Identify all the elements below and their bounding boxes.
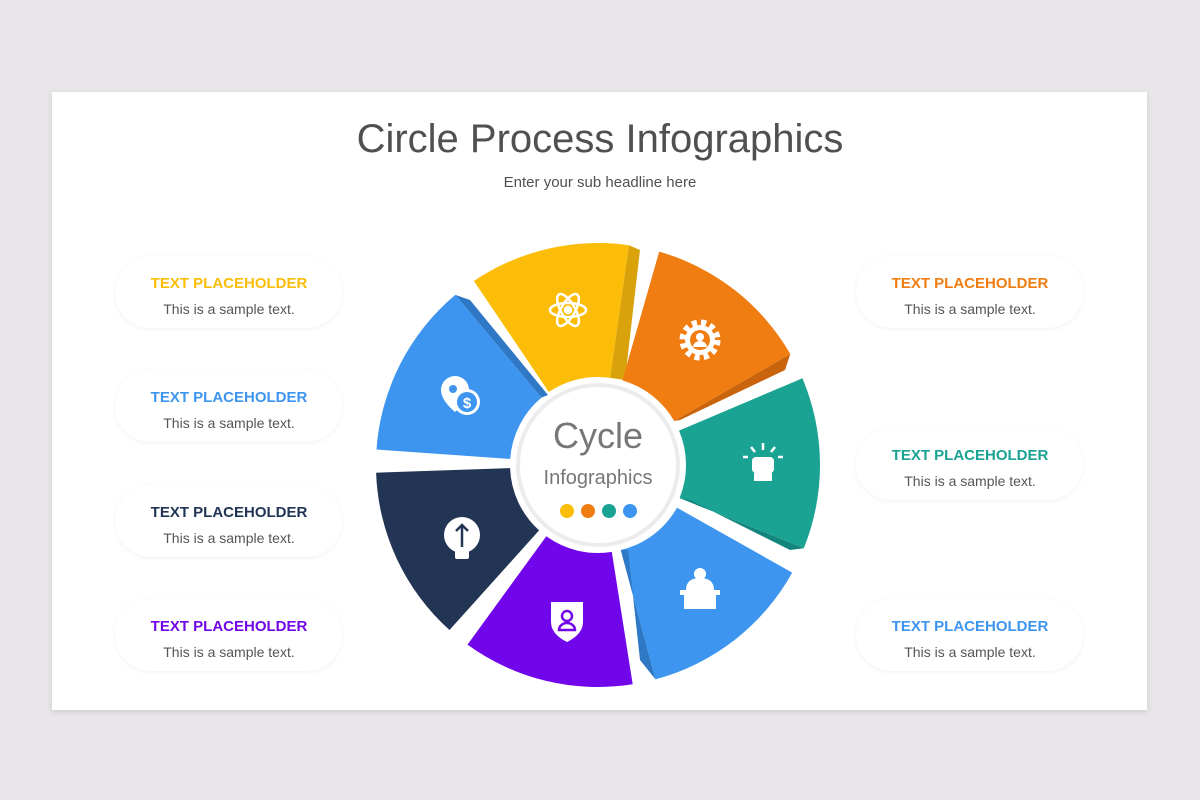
- icon: location dollar: $: [463, 395, 472, 412]
- pill: left 3: [115, 485, 342, 557]
- title: Circle Process Infographics: [357, 117, 843, 161]
- pill: right 1: [856, 256, 1083, 328]
- pill: left 2: This is a sample text.: [163, 415, 295, 431]
- segment: orange: [622, 252, 790, 421]
- pill: right 1: TEXT PLACEHOLDER: [892, 275, 1048, 292]
- pill: right 2: TEXT PLACEHOLDER: [892, 447, 1048, 464]
- pill: left 2: TEXT PLACEHOLDER: [151, 389, 307, 406]
- pill: right 2: This is a sample text.: [904, 473, 1036, 489]
- segment: teal: [679, 378, 820, 550]
- pill: left 2: [115, 370, 342, 442]
- subtitle: Enter your sub headline here: [504, 174, 696, 191]
- pill: left 4: [115, 599, 342, 671]
- segment: navy: [376, 468, 539, 630]
- pill: right 3: This is a sample text.: [904, 644, 1036, 660]
- pill: right 3: TEXT PLACEHOLDER: [892, 618, 1048, 635]
- segment: yellow: [474, 243, 640, 392]
- pill: right 2: [856, 428, 1083, 500]
- segment: blue left: [376, 295, 548, 459]
- segment: purple: [468, 536, 633, 687]
- icon: atom: [550, 291, 586, 329]
- icon: speaker podium: [680, 568, 720, 609]
- pill: left 3: This is a sample text.: [163, 530, 295, 546]
- pill: left 4: This is a sample text.: [163, 644, 295, 660]
- pill: left 1: [115, 256, 342, 328]
- center circle: [518, 385, 678, 545]
- pill: left 3: TEXT PLACEHOLDER: [151, 504, 307, 521]
- pill: right 3: [856, 599, 1083, 671]
- icon: brain: [444, 517, 480, 559]
- center circle: Cycle: [553, 415, 643, 456]
- slide card: [52, 92, 1147, 710]
- icon: shield user: [551, 602, 583, 642]
- segment: blue right: [621, 508, 792, 679]
- pill: left 4: TEXT PLACEHOLDER: [151, 618, 307, 635]
- pill: left 1: This is a sample text.: [163, 301, 295, 317]
- pill: right 1: This is a sample text.: [904, 301, 1036, 317]
- icon: location dollar: [441, 376, 480, 415]
- center circle: Infographics: [544, 467, 652, 489]
- icon: fist: [743, 443, 783, 481]
- icon: gear person: [683, 323, 717, 357]
- pill: left 1: TEXT PLACEHOLDER: [151, 275, 307, 292]
